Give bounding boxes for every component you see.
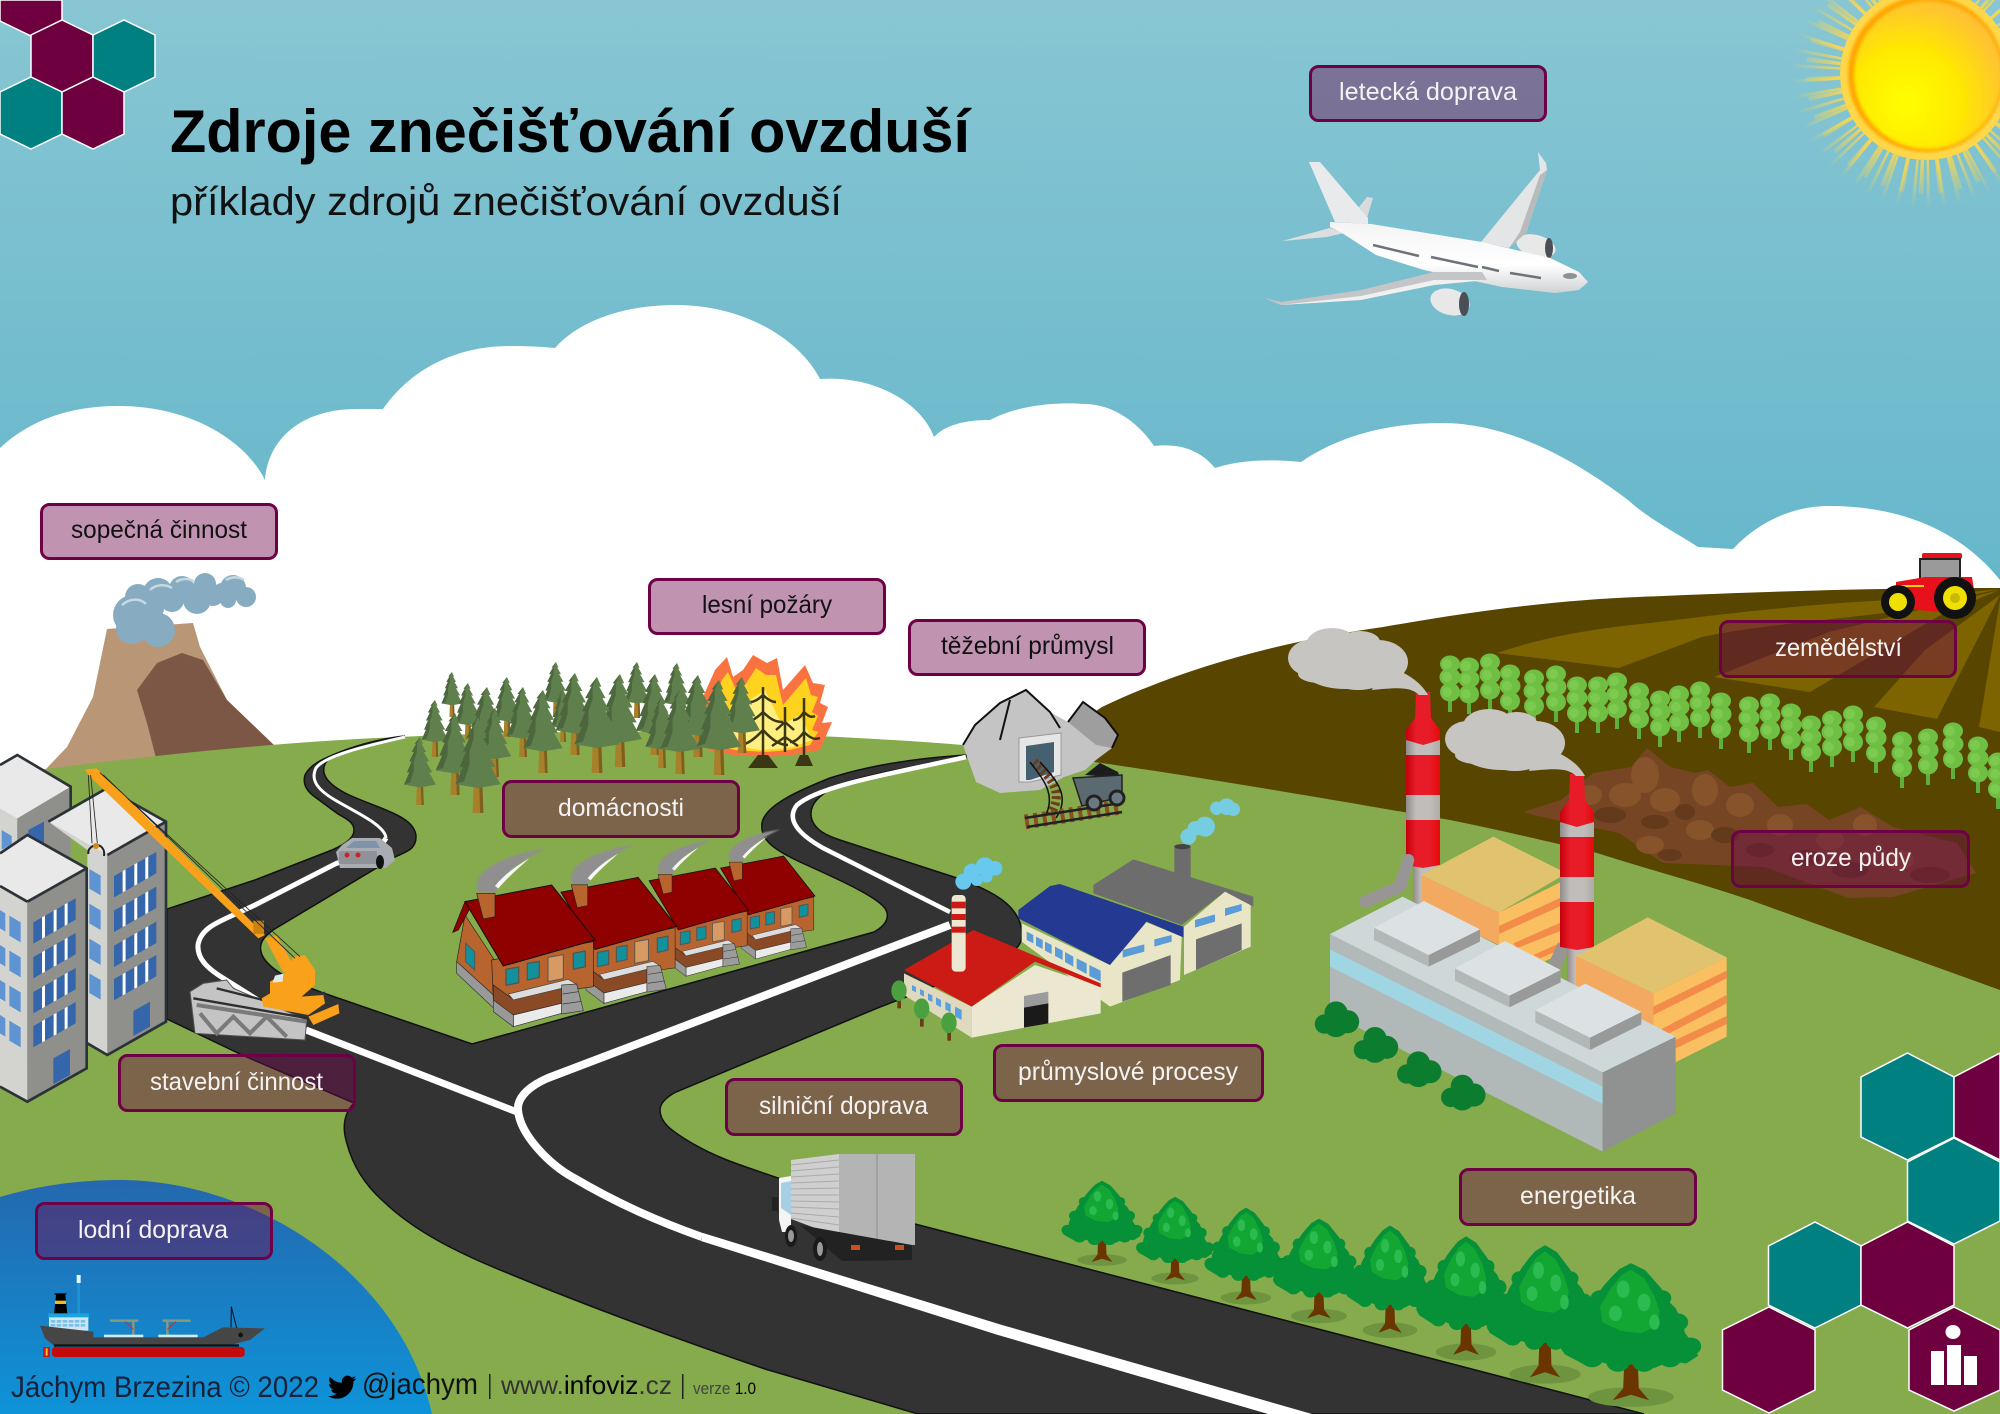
- footer credits: Jáchym Brzezina © 2022: [11, 1371, 319, 1404]
- construction crane: [85, 768, 339, 1040]
- bushes: [1315, 1001, 1486, 1110]
- apartment buildings: [0, 755, 166, 1102]
- footer credits: [11, 1368, 756, 1404]
- label: domácnosti: [504, 782, 738, 836]
- factory: blue hall: [1018, 884, 1183, 1007]
- front building: [0, 835, 87, 1102]
- footer credits: www.infoviz.cz: [500, 1370, 672, 1400]
- icon: sun: [1816, 0, 2000, 184]
- label: lodní doprava: [36, 1204, 272, 1258]
- label: eroze půdy: eroze půdy: [1791, 844, 1911, 872]
- factory: grey hall: [1093, 798, 1253, 975]
- green ground: [0, 732, 2000, 1414]
- road network: [167, 736, 1644, 1414]
- power plant chimney 1 and smoke: [1288, 628, 1440, 905]
- footer credits: @jachym: [362, 1368, 478, 1401]
- middle building: [48, 788, 166, 1055]
- label: energetika: energetika: [1520, 1182, 1636, 1210]
- label: sopečná činnost: sopečná činnost: [71, 516, 247, 544]
- power plant chimney 2 and smoke: [1445, 709, 1594, 987]
- icon: infoviz logo: [1931, 1325, 1977, 1385]
- sky background: [0, 0, 2000, 760]
- airplane: [1264, 152, 1588, 320]
- factory: red hall: [891, 857, 1101, 1041]
- plantation rows of small trees: [1440, 654, 2000, 809]
- tractor: [1881, 553, 1976, 619]
- eroded soil mound: [1523, 748, 1976, 898]
- label: stavební činnost: stavební činnost: [150, 1068, 323, 1096]
- row of large trees: [1062, 1182, 1701, 1407]
- row of houses: [453, 829, 815, 1027]
- main hall: [1330, 897, 1676, 1152]
- title: Zdroje znečišťování ovzduší: [170, 98, 972, 165]
- car: [336, 838, 395, 869]
- label: silniční doprava: silniční doprava: [759, 1092, 928, 1120]
- back building: [0, 755, 71, 890]
- label: silniční doprava: [726, 1080, 962, 1134]
- label: stavební činnost: [120, 1056, 354, 1110]
- water: sea: [0, 1180, 432, 1414]
- label: sopečná činnost: [42, 504, 276, 558]
- power plant main building: [1315, 897, 1727, 1152]
- forest fire: [703, 655, 832, 768]
- label: energetika: [1460, 1170, 1696, 1224]
- roof boxes: [1374, 901, 1641, 1050]
- icon: hexagons top left: [0, 0, 155, 149]
- label: lesní požáry: [650, 580, 884, 634]
- ship: [40, 1275, 265, 1357]
- subtitle: příklady zdrojů znečišťování ovzduší: [170, 180, 842, 224]
- label: letecká doprava: [1310, 66, 1546, 120]
- factory buildings: [891, 798, 1253, 1041]
- clouds: [0, 305, 2000, 770]
- label: lodní doprava: lodní doprava: [78, 1216, 228, 1244]
- label: zemědělství: zemědělství: [1775, 634, 1902, 662]
- label: lesní požáry: lesní požáry: [702, 591, 832, 619]
- brown hill: fields: [1060, 588, 2000, 1000]
- label: průmyslové procesy: průmyslové procesy: [1018, 1058, 1238, 1086]
- truck: [772, 1154, 915, 1261]
- label: domácnosti: domácnosti: [558, 794, 684, 822]
- coal mine: [963, 690, 1124, 827]
- footer credits: verze 1.0: [693, 1379, 756, 1398]
- icon: hexagons bottom right: [1722, 1053, 2000, 1413]
- storage block B: [1576, 917, 1727, 1073]
- forest of pine trees: [404, 662, 760, 813]
- label: zemědělství: [1720, 622, 1956, 676]
- road markings: [198, 737, 1312, 1414]
- label: průmyslové procesy: [994, 1046, 1262, 1100]
- label: eroze půdy: [1732, 832, 1968, 886]
- volcano: [45, 573, 277, 770]
- label: letecká doprava: letecká doprava: [1339, 78, 1517, 106]
- power plant: coal heap block A: [1365, 837, 1572, 983]
- label: těžební průmysl: [910, 620, 1144, 674]
- label: těžební průmysl: těžební průmysl: [941, 632, 1114, 660]
